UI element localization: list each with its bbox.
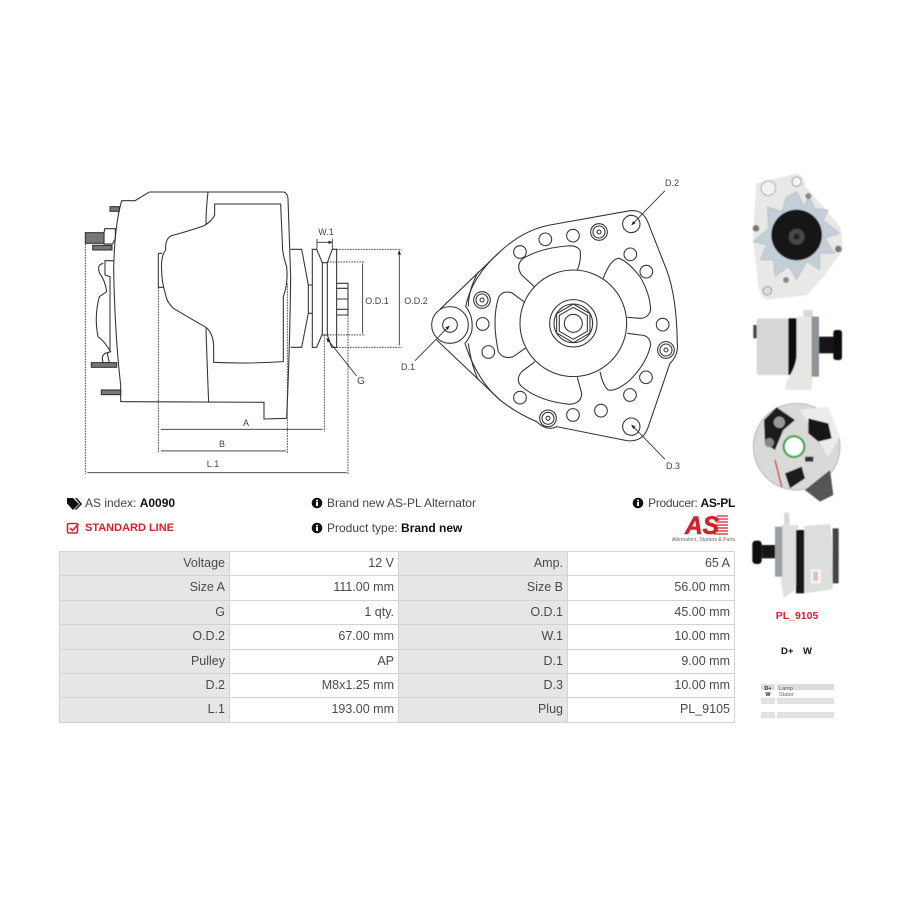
housing outline — [437, 211, 677, 441]
connector legend table: Stator — [779, 692, 794, 698]
fan windows — [495, 246, 651, 404]
terminal bolts — [85, 207, 121, 395]
side view dimension labels: A — [243, 418, 249, 428]
AS index: AS index: A0090 — [85, 496, 175, 510]
central hub and nut — [520, 270, 627, 377]
alternator housing — [114, 192, 291, 419]
pulley and shaft — [291, 249, 348, 347]
row: pulley: 9.00 mm — [681, 654, 730, 668]
row: size: 56.00 mm — [674, 580, 730, 594]
dimension lines — [85, 239, 402, 474]
row: L.1: PL_9105 — [680, 702, 730, 716]
AS logo: Alternators, Starters & Parts — [672, 537, 735, 543]
row: L.1: Plug — [538, 702, 563, 716]
standard line: STANDARD LINE — [85, 522, 174, 534]
row: O.D.2: O.D.2 — [192, 629, 225, 643]
row: size: 111.00 mm — [333, 580, 394, 594]
row: O.D.2 — [59, 625, 735, 649]
row: L.1: 193.00 mm — [331, 702, 394, 716]
row: D.2 — [59, 674, 735, 697]
row: size: Size A — [190, 580, 225, 594]
leader arrows — [415, 191, 665, 459]
front view labels: D.1 — [401, 362, 415, 372]
row: O.D.2: W.1 — [541, 629, 563, 643]
connector legend table: D+ — [764, 686, 772, 692]
front view labels: D.2 — [665, 178, 679, 188]
side view dimension labels: O.D.1 — [365, 296, 389, 306]
row: size — [59, 576, 735, 600]
front view technical drawing — [415, 191, 677, 459]
side view dimension labels: B — [219, 439, 225, 449]
side view dimension labels: L.1 — [207, 459, 219, 469]
row: G: 45.00 mm — [674, 605, 730, 619]
bolt holes — [476, 215, 669, 435]
connector labels: D+ W — [781, 646, 812, 657]
row: O.D.2: 67.00 mm — [338, 629, 394, 643]
AS logo: AS — [684, 512, 719, 540]
row: L.1: L.1 — [208, 702, 225, 716]
photo: alternator side mirrored — [752, 513, 839, 598]
row: voltage: Amp. — [534, 556, 563, 570]
row: O.D.2: 10.00 mm — [674, 629, 730, 643]
icon: info producer — [633, 498, 643, 508]
side view dimension labels: G — [357, 376, 365, 387]
row: D.2: M8x1.25 mm — [322, 678, 394, 692]
icon: tags — [67, 498, 82, 510]
plug code: PL_9105 — [776, 610, 818, 622]
icon: info type — [312, 523, 322, 533]
row: G: G — [215, 605, 225, 619]
mounting ear D.1 — [432, 307, 468, 343]
icon: info brand — [312, 498, 322, 508]
row: G: O.D.1 — [530, 605, 563, 619]
AS logo — [672, 512, 735, 543]
row: voltage: Voltage — [183, 556, 225, 570]
side view dimension labels: O.D.2 — [404, 296, 428, 306]
front view labels — [401, 178, 680, 471]
row: pulley: Pulley — [191, 654, 225, 668]
row: voltage — [59, 551, 735, 575]
row: pulley: D.1 — [544, 654, 563, 668]
side view dimension labels — [207, 227, 428, 469]
brand new text: Brand new AS-PL Alternator — [327, 496, 476, 510]
threaded inserts — [474, 224, 674, 427]
row: voltage: 12 V — [368, 556, 394, 570]
icon: red checkbox — [68, 524, 78, 533]
row: pulley — [59, 650, 735, 673]
row: size: Size B — [527, 580, 563, 594]
row: G — [59, 601, 735, 624]
front view labels: D.3 — [666, 461, 680, 471]
row: pulley: AP — [377, 654, 394, 668]
side view dimension labels: W.1 — [318, 227, 334, 237]
row: D.2: D.2 — [206, 678, 225, 692]
connector legend table: Lamp — [779, 686, 793, 692]
row: L.1 — [59, 698, 735, 723]
row: voltage: 65 A — [705, 556, 730, 570]
row: D.2: 10.00 mm — [674, 678, 730, 692]
connector legend table — [761, 684, 834, 718]
side view technical drawing — [85, 192, 402, 474]
row: D.2: D.3 — [544, 678, 563, 692]
row: G: 1 qty. — [364, 605, 394, 619]
producer: Producer: AS-PL — [648, 496, 735, 510]
photo: alternator front — [753, 174, 843, 299]
photo: alternator rear — [753, 403, 840, 502]
photo: alternator side — [753, 310, 842, 390]
connector legend table: W — [765, 692, 771, 698]
product type: Product type: Brand new — [327, 521, 462, 535]
